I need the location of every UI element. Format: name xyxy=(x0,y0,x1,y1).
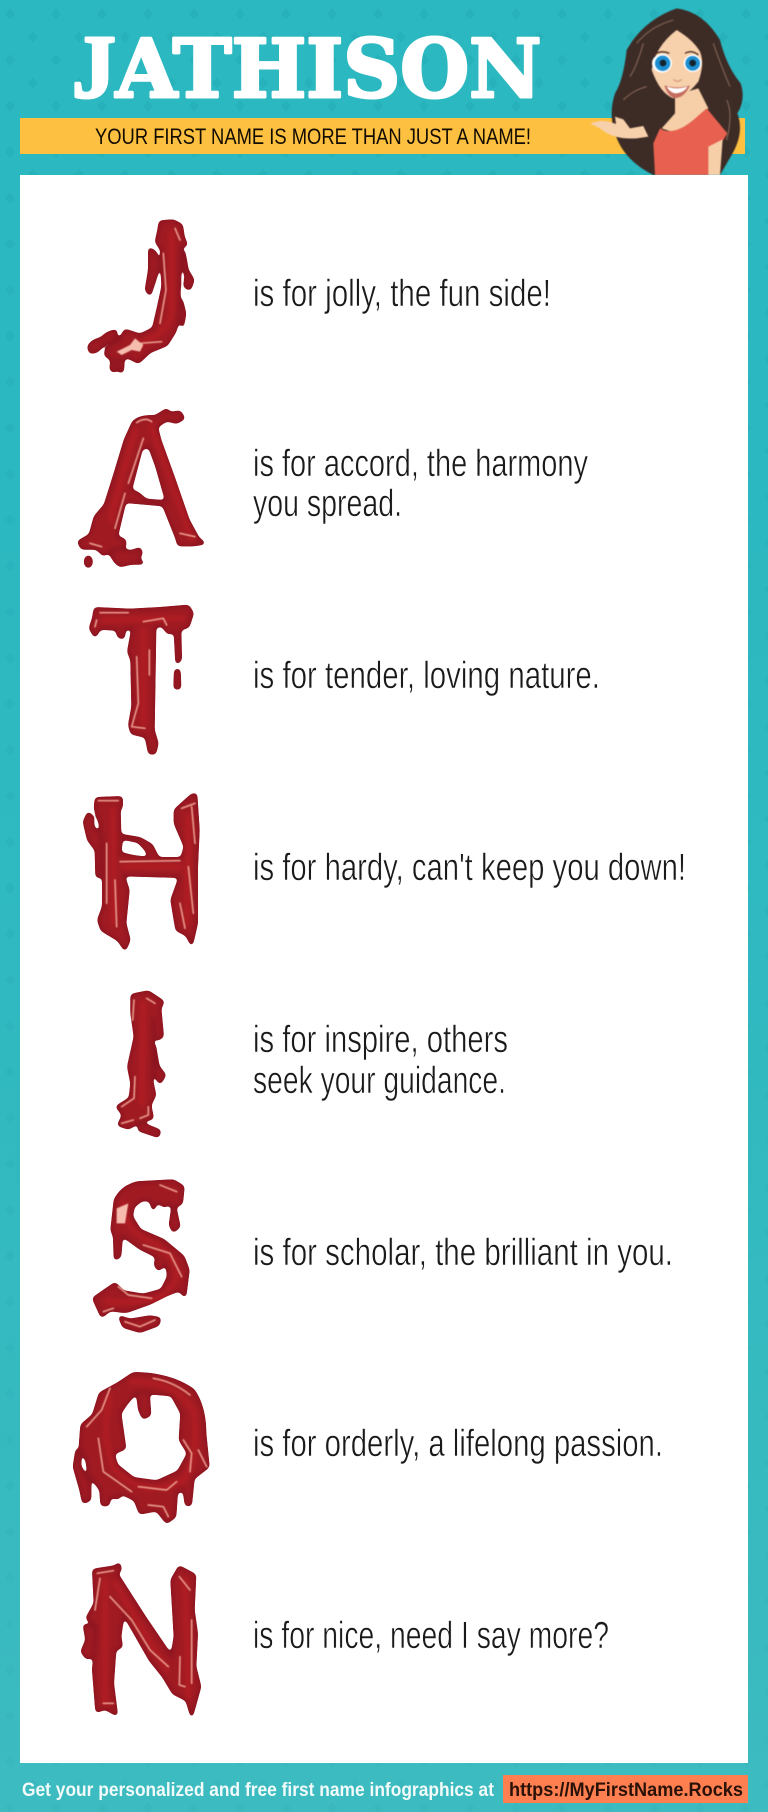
row: letter O xyxy=(74,1373,663,1523)
caption A: is for accord, the harmony xyxy=(253,443,588,485)
title: JATHISON xyxy=(72,18,541,117)
caption N: is for nice, need I say more? xyxy=(253,1615,609,1657)
caption A: you spread. xyxy=(253,483,402,525)
icon: blood letter N xyxy=(82,1563,200,1717)
footer text: Get your personalized and free first name infographics at xyxy=(22,1780,495,1801)
icon: blood letter I xyxy=(117,992,165,1137)
row: letter N xyxy=(82,1563,609,1717)
icon: blood letter H xyxy=(84,794,198,950)
row: letter J xyxy=(88,221,551,372)
caption I xyxy=(253,1019,508,1102)
caption A xyxy=(253,443,588,525)
icon: blood letter T xyxy=(90,606,193,753)
row: letter T xyxy=(90,606,600,753)
row: letter S xyxy=(93,1181,673,1332)
caption I: is for inspire, others xyxy=(253,1019,508,1061)
icon: blood letter S xyxy=(93,1181,188,1332)
icon: blood letter O xyxy=(74,1373,208,1523)
row: letter A xyxy=(78,409,588,567)
caption T: is for tender, loving nature. xyxy=(253,655,600,697)
tagline text: YOUR FIRST NAME IS MORE THAN JUST A NAME! xyxy=(95,124,531,149)
caption I: seek your guidance. xyxy=(253,1060,506,1102)
icon: blood letter J xyxy=(88,221,193,372)
banner: tagline strip xyxy=(20,118,745,154)
icon: blood letter A xyxy=(78,409,204,567)
icon: cartoon woman presenter xyxy=(590,8,743,175)
row: letter I xyxy=(117,992,508,1137)
caption J: is for jolly, the fun side! xyxy=(253,273,551,315)
row: letter H xyxy=(84,794,686,950)
footer url badge: https://MyFirstName.Rocks xyxy=(509,1780,743,1801)
